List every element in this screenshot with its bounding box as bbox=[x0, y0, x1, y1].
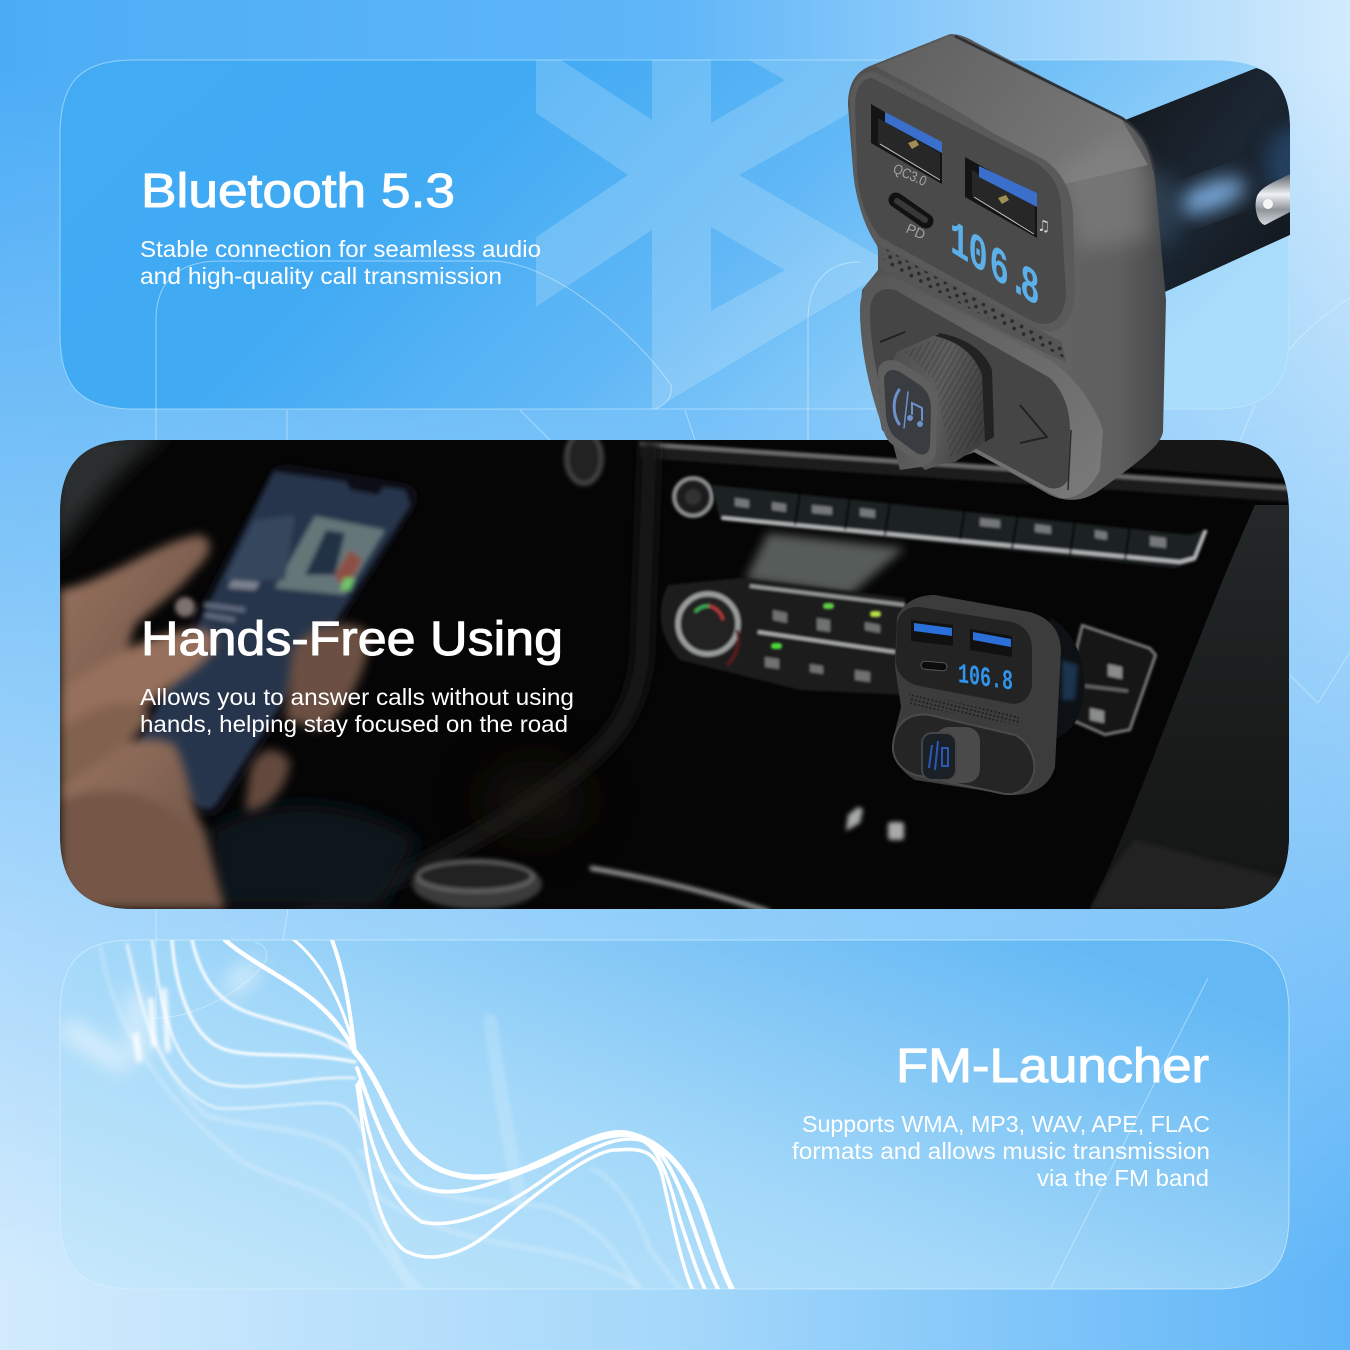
text: FM-Launcher description: via the FM band bbox=[1037, 1165, 1209, 1191]
photo: upper left cabin shading bbox=[60, 440, 163, 552]
photo: right seat heat buttons bbox=[1060, 625, 1156, 735]
speaker band bbox=[909, 692, 1019, 725]
USB-C port bbox=[896, 200, 926, 221]
small product in photo bbox=[893, 595, 1084, 795]
photo: glowing door detail bbox=[488, 766, 580, 834]
wave lines bbox=[70, 940, 732, 1289]
text: FM-Launcher description: Supports WMA, MP3, WAV, APE, FLAC bbox=[802, 1111, 1210, 1137]
face bbox=[896, 607, 1032, 704]
chrome tip bbox=[1256, 174, 1290, 225]
text: FM-Launcher description: formats and allows music transmission bbox=[792, 1138, 1210, 1164]
back edge bbox=[955, 36, 1154, 170]
icon: Bluetooth symbol bbox=[536, 60, 900, 409]
panel: FM-Launcher background bbox=[60, 940, 1289, 1289]
photo: console curve bbox=[300, 440, 650, 915]
lower pod bbox=[893, 714, 1034, 794]
photo: hand bbox=[60, 535, 368, 909]
front face bbox=[855, 78, 1066, 324]
lower pod bbox=[860, 275, 1103, 498]
body silhouette bbox=[848, 34, 1166, 500]
panel: car interior photo bbox=[50, 430, 1300, 915]
arrow markers bbox=[880, 332, 1047, 443]
text: Bluetooth description: Stable connection for seamless audio bbox=[140, 236, 541, 262]
icon: call and music bbox=[894, 390, 922, 428]
photo: climate labels bbox=[765, 610, 880, 682]
speaker grille bbox=[877, 243, 1066, 362]
USB port 2 bbox=[965, 157, 1037, 238]
text: Bluetooth description: and high-quality call transmission bbox=[140, 263, 502, 289]
photo: leather panel bbox=[1090, 505, 1290, 909]
label: QC3.0: QC3.0 bbox=[891, 160, 929, 189]
photo: screen reflection bbox=[745, 533, 905, 595]
photo: door trim bbox=[640, 441, 1290, 502]
label: PD: PD bbox=[904, 220, 928, 243]
text: FM-Launcher description bbox=[792, 1111, 1210, 1191]
cylinder plug bbox=[1120, 68, 1325, 300]
photo: rotary knob near phone bbox=[566, 432, 602, 484]
panel: Bluetooth background bbox=[60, 60, 1289, 409]
cylinder bbox=[1050, 618, 1084, 740]
thin outline decorations bbox=[156, 261, 1350, 1289]
knob bbox=[935, 727, 980, 783]
glow: left wave highlight bbox=[70, 970, 250, 1062]
heading: Hands-Free Using: Hands-Free Using bbox=[141, 613, 563, 666]
photo: top button strip bbox=[712, 485, 1206, 568]
faint wave strands bbox=[127, 942, 420, 1289]
upper-left strands bbox=[172, 940, 355, 1062]
photo: album art bbox=[275, 516, 385, 595]
front bezel bbox=[850, 72, 1075, 331]
photo: green indicators bbox=[771, 603, 881, 649]
photo: sleeve bbox=[210, 805, 420, 909]
icon: music note: ♫ bbox=[1037, 217, 1050, 235]
heading: FM-Launcher: FM-Launcher bbox=[896, 1040, 1209, 1093]
photo: upper texture panel bbox=[1132, 440, 1284, 480]
dial knob bbox=[878, 333, 994, 470]
heading: Bluetooth 5.3: Bluetooth 5.3 bbox=[141, 165, 455, 218]
text: Hands-Free description: Allows you to answer calls without using bbox=[140, 684, 574, 710]
photo: phone bbox=[126, 465, 417, 817]
usb ports bbox=[911, 620, 953, 646]
top face bbox=[875, 36, 1148, 185]
photo: seat icons bbox=[846, 807, 904, 840]
bright tapered streaks bbox=[136, 990, 168, 1060]
photo: chrome console line bbox=[590, 868, 770, 912]
photo: top knob bbox=[674, 478, 712, 516]
text: Hands-Free description bbox=[140, 684, 574, 737]
bright pinch strands bbox=[225, 940, 355, 1052]
display: 106.8: 106.8 bbox=[950, 210, 1040, 323]
photo: lower console highlight bbox=[1090, 840, 1290, 909]
photo: climate control strip bbox=[661, 578, 905, 695]
product: FM transmitter bbox=[848, 34, 1325, 500]
text: Hands-Free description: hands, helping stay focused on the road bbox=[140, 711, 568, 737]
body bbox=[893, 595, 1061, 795]
text: Bluetooth description bbox=[140, 236, 541, 289]
side highlight bbox=[1055, 135, 1150, 250]
display digits: 106.8 bbox=[958, 660, 1013, 699]
USB port 1 bbox=[871, 104, 942, 184]
photo: gear knob bbox=[412, 859, 542, 909]
icon: call/music bbox=[929, 741, 948, 770]
